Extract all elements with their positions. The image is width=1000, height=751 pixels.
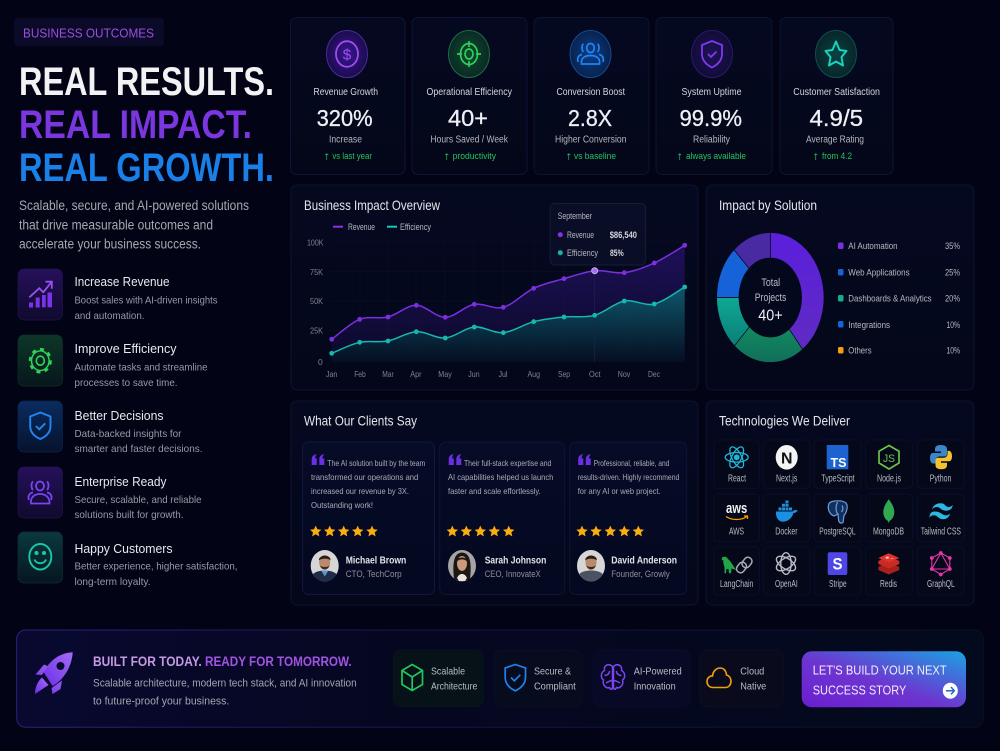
- tooltip: september: $86,540: [610, 230, 637, 240]
- panel: what our clients say: [291, 401, 698, 605]
- tile: React: [714, 440, 759, 488]
- KPI card: revenue growth: Increase: [329, 134, 362, 146]
- tile: MongoDB: [866, 494, 912, 542]
- chip: scalable architecture: [393, 650, 483, 707]
- y axis labels: 0: [318, 357, 323, 367]
- testimonial: david anderson: Professional, reliable, and: [594, 458, 670, 468]
- chip: secure and compliant: Compliant: [534, 682, 576, 693]
- banner subtext: Scalable architecture, modern tech stack, and AI innovation: [93, 678, 357, 690]
- KPI card: customer satisfaction: Customer Satisfaction: [793, 87, 880, 98]
- testimonial: david anderson: Founder, Growly: [611, 569, 670, 580]
- tile: Next.js: [763, 440, 810, 488]
- icon: dollar coin: $: [343, 46, 352, 64]
- feature: increase revenue: Increase Revenue: [74, 274, 170, 289]
- donut chart: [717, 232, 824, 362]
- donut legend: Integrations: [848, 320, 890, 330]
- donut legend: Web Applications: [848, 268, 910, 278]
- KPI card: conversion boost: [534, 18, 649, 174]
- banner subtext: to future-proof your business.: [93, 695, 229, 707]
- KPI card: revenue growth: ↑: [323, 150, 330, 162]
- heading: Technologies We Deliver: [719, 412, 850, 428]
- icon: users: [570, 30, 611, 78]
- donut legend: Others: [848, 346, 872, 356]
- KPI card: conversion boost: vs baseline: [574, 151, 616, 162]
- icon: rising bar chart: [18, 269, 62, 320]
- chip: scalable architecture: Scalable: [431, 666, 465, 677]
- donut legend: 10%: [946, 346, 960, 356]
- y axis labels: [307, 238, 324, 367]
- tile: OpenAI: OpenAI: [775, 579, 798, 590]
- icon: node.js: JS: [883, 453, 895, 465]
- KPI card: conversion boost: ↑: [565, 150, 572, 162]
- tile: Stripe: [814, 547, 861, 595]
- y axis labels: 100K: [307, 238, 324, 248]
- icon: docker whale: [776, 500, 798, 522]
- x axis labels: [326, 369, 661, 379]
- icon: langchain parrot and chain: [722, 556, 754, 574]
- title: REAL IMPACT.: [19, 103, 252, 147]
- tooltip: september: Revenue: [567, 230, 594, 240]
- testimonial: sarah johnson: faster and scale effortlessly.: [448, 486, 541, 496]
- feature: enterprise ready: Secure, scalable, and reliable: [74, 494, 202, 506]
- call to action button: SUCCESS STORY: [813, 682, 907, 697]
- tile: Docker: Docker: [775, 526, 798, 537]
- feature: happy customers: Better experience, higher satisfaction,: [74, 560, 238, 572]
- revenue area: [332, 245, 685, 362]
- KPI card: operational efficiency: 40+: [448, 105, 488, 131]
- revenue points: [329, 243, 687, 342]
- revenue line: [332, 245, 685, 339]
- KPI card: system uptime: Reliability: [693, 134, 730, 146]
- tile: React: React: [728, 474, 746, 485]
- icon: cloud: [707, 668, 731, 688]
- tooltip: september: September: [558, 211, 592, 221]
- feature: better decisions: Better Decisions: [74, 408, 164, 423]
- icon: mongodb leaf: [883, 499, 894, 523]
- KPI card: operational efficiency: ↑: [443, 150, 450, 162]
- feature: better decisions: Data-backed insights for: [74, 428, 182, 440]
- icon: typescript: TS: [830, 455, 847, 470]
- chip: secure and compliant: [494, 650, 582, 707]
- KPI card: revenue growth: [290, 18, 405, 174]
- x axis labels: Feb: [354, 369, 366, 379]
- x axis labels: Sep: [558, 369, 570, 379]
- icon: shield: [505, 664, 526, 691]
- chart legend: [333, 222, 431, 232]
- tile: Next.js: Next.js: [776, 474, 797, 485]
- donut legend: 10%: [946, 320, 960, 330]
- title: REAL RESULTS.: [19, 60, 274, 104]
- tile: Tailwind CSS: Tailwind CSS: [921, 526, 961, 537]
- x axis labels: Nov: [618, 369, 631, 379]
- KPI card: customer satisfaction: from 4.2: [822, 151, 852, 162]
- icon: stripe: S: [832, 556, 842, 574]
- testimonial: david anderson: David Anderson: [611, 554, 677, 566]
- KPI card: system uptime: 99.9%: [680, 105, 742, 131]
- feature: improve efficiency: Automate tasks and streamline: [74, 362, 208, 374]
- KPI card: system uptime: ↑: [676, 150, 684, 162]
- testimonial: sarah johnson: Sarah Johnson: [485, 554, 546, 566]
- icon: postgresql elephant: [828, 501, 847, 523]
- KPI card: system uptime: always available: [686, 151, 746, 162]
- panel: technologies we deliver: [706, 401, 974, 605]
- feature: happy customers: Happy Customers: [74, 541, 173, 556]
- badge: business outcomes: [14, 18, 164, 46]
- feature: enterprise ready: [18, 467, 202, 521]
- banner subtext: [93, 678, 357, 707]
- KPI card: revenue growth: vs last year: [332, 151, 372, 162]
- chip: cloud native: Native: [740, 682, 767, 693]
- tile: PostgreSQL: [814, 494, 861, 542]
- intro paragraph: that drive measurable outcomes and: [19, 218, 213, 232]
- avatar: michael brown: [311, 550, 339, 581]
- KPI card: revenue growth: 320%: [317, 105, 373, 131]
- donut legend: 20%: [945, 294, 960, 304]
- donut legend: AI Automation: [848, 241, 898, 251]
- y axis labels: 75K: [310, 267, 323, 277]
- rating stars: [576, 526, 644, 536]
- chip: secure and compliant: Secure &: [534, 666, 571, 677]
- icon: star: [816, 30, 856, 78]
- KPI card: operational efficiency: [412, 18, 527, 174]
- icon: tailwind waves: [929, 503, 953, 519]
- tile: Node.js: [866, 440, 912, 488]
- chip: ai-powered innovation: Innovation: [634, 682, 676, 693]
- intro paragraph: [19, 198, 249, 252]
- KPI card: operational efficiency: Operational Efficiency: [426, 87, 512, 98]
- donut center label: Total: [761, 277, 780, 289]
- donut legend: 25%: [945, 268, 960, 278]
- x axis labels: Jun: [468, 369, 480, 379]
- icon: arrow circle: [943, 683, 958, 699]
- rating stars: [310, 526, 378, 536]
- efficiency points: [329, 285, 687, 356]
- intro paragraph: accelerate your business success.: [19, 236, 201, 252]
- icon: graphql: [930, 552, 951, 576]
- KPI card: conversion boost: Conversion Boost: [556, 87, 625, 98]
- line chart: [307, 238, 687, 379]
- KPI card: revenue growth: Revenue Growth: [314, 87, 378, 98]
- tile: LangChain: LangChain: [720, 579, 753, 590]
- chip: ai-powered innovation: AI-Powered: [634, 666, 682, 677]
- x axis labels: Mar: [382, 369, 394, 379]
- feature: happy customers: long-term loyalty.: [74, 576, 150, 588]
- feature: happy customers: [18, 532, 238, 588]
- KPI card: operational efficiency: productivity: [453, 151, 496, 162]
- bottom banner: [17, 630, 983, 727]
- KPI card: customer satisfaction: ↑: [812, 150, 820, 162]
- testimonial: michael brown: Outstanding work!: [311, 500, 373, 510]
- testimonial: michael brown: Michael Brown: [346, 554, 406, 566]
- x axis labels: Apr: [410, 369, 422, 379]
- heading: Business Impact Overview: [304, 197, 441, 213]
- testimonial: sarah johnson: CEO, InnovateX: [485, 569, 541, 580]
- rating stars: [447, 526, 514, 536]
- feature: better decisions: [18, 401, 202, 455]
- testimonial: michael brown: [302, 442, 434, 594]
- chart legend: Revenue: [348, 222, 375, 232]
- icon: cube: [402, 664, 422, 690]
- icon: python: [930, 445, 952, 469]
- KPI card: conversion boost: Higher Conversion: [555, 134, 626, 146]
- testimonial: michael brown: The AI solution built by the team: [327, 458, 425, 468]
- chart legend: Efficiency: [400, 222, 431, 232]
- testimonial: david anderson: results-driven. Highly recommend: [578, 472, 680, 482]
- KPI card: system uptime: [656, 18, 772, 174]
- tile: OpenAI: [763, 547, 810, 595]
- tooltip: september: 85%: [610, 248, 624, 258]
- KPI card: operational efficiency: Hours Saved / Week: [430, 134, 509, 146]
- feature: improve efficiency: processes to save time.: [74, 377, 178, 389]
- x axis labels: Oct: [589, 369, 601, 379]
- testimonial: sarah johnson: AI capabilities helped us launch: [448, 472, 554, 482]
- tile: GraphQL: [917, 547, 964, 595]
- tile: Stripe: Stripe: [829, 579, 847, 590]
- panel: impact by solution: [706, 185, 974, 390]
- icon: smiley: [18, 532, 62, 583]
- tile: Redis: Redis: [880, 579, 897, 590]
- KPI card: customer satisfaction: [780, 18, 893, 174]
- icon: target: [448, 30, 490, 78]
- testimonial: sarah johnson: Their full-stack expertise and: [464, 458, 552, 468]
- feature: enterprise ready: solutions built for growth.: [74, 509, 184, 521]
- KPI card: customer satisfaction: Average Rating: [806, 134, 864, 146]
- icon: quote mark: [578, 454, 591, 465]
- tooltip: september: Efficiency: [567, 248, 598, 258]
- banner headline: BUILT FOR TODAY.: [93, 654, 202, 669]
- icon: quote mark: [449, 454, 461, 465]
- icon: next.js: N: [781, 450, 792, 468]
- tile: AWS: AWS: [729, 526, 744, 537]
- icon: redis stack: [878, 553, 899, 574]
- tile: Node.js: Node.js: [877, 474, 901, 485]
- feature: increase revenue: and automation.: [74, 310, 144, 322]
- tile: Python: [917, 440, 964, 488]
- testimonial: sarah johnson: [440, 442, 565, 594]
- testimonial: michael brown: transformed our operations and: [311, 472, 419, 482]
- feature: improve efficiency: [18, 335, 208, 389]
- donut legend: Dashboards & Analytics: [848, 294, 932, 304]
- donut center label: 40+: [758, 308, 783, 324]
- icon: dollar coin: [326, 30, 368, 78]
- KPI card: system uptime: System Uptime: [682, 87, 742, 98]
- KPI card: customer satisfaction: 4.9/5: [810, 105, 863, 131]
- chip: cloud native: Cloud: [740, 666, 764, 677]
- tile: GraphQL: GraphQL: [927, 579, 955, 590]
- icon: rocket: [35, 652, 73, 694]
- feature: enterprise ready: Enterprise Ready: [74, 474, 167, 489]
- y axis labels: 25K: [310, 326, 323, 336]
- icon: shield with check: [18, 401, 62, 452]
- y axis labels: 50K: [310, 296, 323, 306]
- feature: increase revenue: [18, 269, 218, 322]
- x axis labels: Dec: [648, 369, 661, 379]
- KPI card: conversion boost: 2.8X: [568, 105, 612, 131]
- testimonial: michael brown: CTO, TechCorp: [346, 569, 402, 580]
- feature: increase revenue: Boost sales with AI-driven insights: [74, 294, 218, 306]
- testimonial: michael brown: increased our revenue by 3X.: [311, 486, 409, 496]
- chip: cloud native: [700, 650, 783, 707]
- title: [19, 60, 274, 190]
- tile: LangChain: [714, 547, 759, 595]
- tile: Python: Python: [930, 474, 951, 485]
- badge: business outcomes: BUSINESS OUTCOMES: [23, 26, 154, 40]
- tooltip: september: [550, 204, 646, 265]
- icon: aws: aws: [726, 500, 747, 517]
- tile: Docker: [763, 494, 810, 542]
- icon: brain: [601, 665, 625, 689]
- banner headline: [93, 654, 352, 669]
- heading: Impact by Solution: [719, 197, 817, 213]
- avatar: david anderson: [577, 550, 605, 581]
- tile: AWS: [714, 494, 759, 542]
- intro paragraph: Scalable, secure, and AI-powered solutions: [19, 198, 249, 213]
- heading: What Our Clients Say: [304, 412, 417, 428]
- x axis labels: Jul: [498, 369, 508, 379]
- chip: scalable architecture: Architecture: [431, 682, 478, 693]
- feature: better decisions: smarter and faster decisions.: [74, 443, 202, 455]
- icon: people: [18, 467, 62, 518]
- tile: TypeScript: [814, 440, 861, 488]
- donut legend: 35%: [945, 241, 960, 251]
- tile: MongoDB: MongoDB: [873, 526, 904, 537]
- feature: improve efficiency: Improve Efficiency: [74, 341, 177, 356]
- x axis labels: Aug: [528, 369, 540, 379]
- efficiency area: [332, 287, 685, 362]
- testimonial: david anderson: [570, 442, 687, 594]
- x axis labels: May: [438, 369, 452, 379]
- tile: Tailwind CSS: [917, 494, 964, 542]
- tile: PostgreSQL: PostgreSQL: [819, 526, 856, 537]
- icon: openai knot: [774, 553, 798, 574]
- call to action button: LET'S BUILD YOUR NEXT: [813, 662, 947, 677]
- avatar: sarah johnson: [448, 550, 476, 581]
- tile: Redis: [866, 547, 912, 595]
- call to action button: [802, 651, 966, 707]
- banner headline: READY FOR TOMORROW.: [205, 654, 352, 669]
- icon: quote mark: [312, 454, 324, 465]
- testimonial: david anderson: for any AI or web project.: [578, 486, 661, 496]
- donut legend: [838, 241, 960, 356]
- efficiency line: [332, 287, 685, 353]
- chip: ai-powered innovation: [593, 650, 690, 707]
- icon: gear: [18, 335, 62, 386]
- panel: business impact overview: [291, 185, 698, 390]
- title: REAL GROWTH.: [19, 146, 274, 190]
- tile: TypeScript: TypeScript: [821, 474, 855, 485]
- x axis labels: Jan: [326, 369, 338, 379]
- icon: shield: [692, 30, 732, 78]
- icon: react atom: [725, 445, 748, 470]
- donut center label: [755, 277, 787, 324]
- donut center label: Projects: [755, 292, 787, 304]
